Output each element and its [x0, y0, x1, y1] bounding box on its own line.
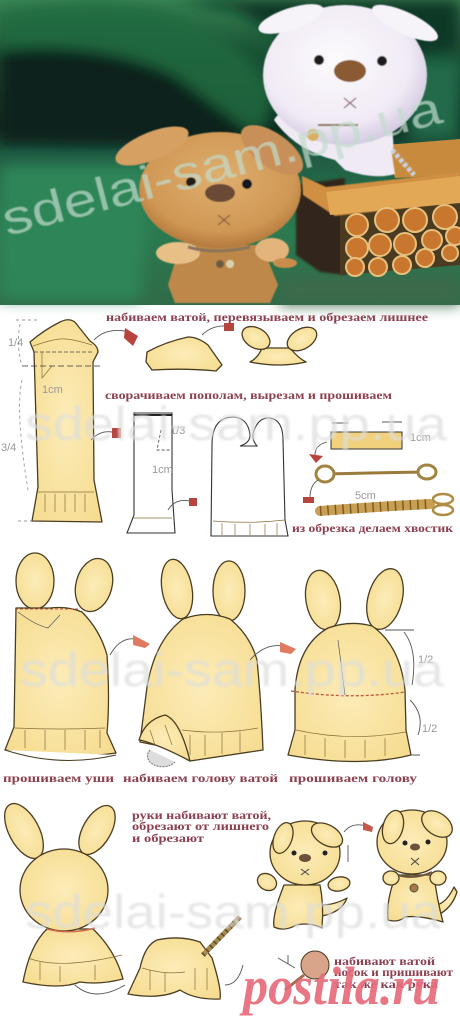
caption: tail: из обрезка делаем хвостик	[292, 521, 453, 535]
tail rope	[320, 490, 453, 515]
photo background: hill and lawn	[0, 0, 460, 305]
caption: trimming: обрезают от лишнего	[132, 819, 269, 833]
watermark row 1: sdelai-sam.pp.ua	[25, 397, 448, 450]
log pile	[296, 139, 460, 276]
caption: and trimmed: и обрезают	[132, 831, 204, 845]
caption row: прошиваем голову	[289, 771, 417, 785]
caption row: прошиваем уши	[3, 771, 114, 785]
panel: photo of two sock puppies	[0, 0, 460, 305]
caption row: набиваем голову ватой	[123, 771, 278, 785]
caption: sew nose: носок и пришивают	[334, 965, 453, 979]
folded sock outline: 1cm	[152, 464, 173, 476]
finished puppy	[377, 805, 457, 922]
red arrows	[91, 323, 327, 510]
folded sock outline	[127, 413, 185, 533]
fraction labels 1/4 and 3/4: 1cm	[42, 384, 63, 396]
stuffed sock top	[146, 337, 222, 371]
caption: stuffing nose: набивают ватой	[334, 954, 435, 968]
panel: step 1 sock cutting	[1, 310, 453, 536]
panel: step 2 sewing ears and head	[3, 553, 437, 785]
figure: stuffing head	[139, 557, 263, 767]
fraction labels 1/4 and 3/4	[1, 320, 63, 521]
watermark row 3: sdelai-sam.pp.ua	[25, 885, 442, 938]
photo watermark: sdelai-sam.pp.ua	[0, 80, 448, 246]
figure: bunny ball	[0, 797, 123, 986]
tail rope: 5cm	[355, 490, 376, 502]
watermark row 2: sdelai-sam.pp.ua	[20, 643, 445, 696]
ears pieces	[238, 322, 321, 365]
arrows between figures	[110, 635, 296, 660]
puppy with arms separate	[254, 818, 373, 929]
figure: sewing head: 1/2	[418, 654, 433, 666]
ball and scissors	[278, 951, 329, 990]
caption: fold: сворачиваем пополам, вырезам и прошиваем	[105, 388, 392, 402]
caption: like arm: так же как рука	[334, 977, 438, 991]
figure: body with tail	[75, 917, 243, 999]
caption: arms: руки набивают ватой,	[132, 808, 271, 822]
folded sock outline: 1/3	[170, 425, 185, 437]
figure: sewing head: 1/2	[422, 723, 437, 735]
caption row	[3, 771, 417, 785]
rectangle strip: 1cm	[410, 432, 431, 444]
brown puppy	[111, 115, 311, 303]
long sock	[22, 320, 102, 522]
panel: step 3 body and finishing	[0, 797, 457, 999]
fraction labels 1/4 and 3/4: 1/4	[8, 337, 23, 349]
fraction labels 1/4 and 3/4: 3/4	[1, 442, 16, 454]
rectangle strip	[331, 422, 431, 449]
postila logo: postila.ru	[239, 956, 440, 1016]
figure: sewing head	[288, 565, 437, 762]
caption: stuffing: набиваем ватой, перевязываем и обрезаем лишнее	[106, 310, 429, 324]
mitten cut shape	[211, 417, 288, 536]
figure: sewing ears	[5, 553, 118, 760]
twisted cord	[316, 465, 436, 482]
white puppy	[255, 0, 442, 176]
